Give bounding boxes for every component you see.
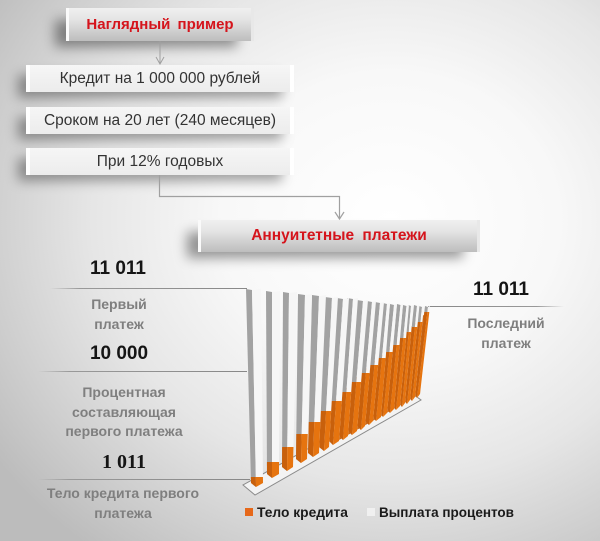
legend marker: principal (245, 508, 253, 516)
leader line: last payment (428, 306, 564, 307)
label: first payment: Первый (91, 296, 147, 312)
arrow: example to loan amount (156, 41, 164, 64)
label: principal part: Тело кредита первого (47, 485, 199, 501)
label: interest part: составляющая (72, 404, 176, 420)
value: interest part: 10 000 (90, 343, 148, 364)
heading: example: Наглядный пример (86, 16, 234, 33)
leader line: first payment (50, 288, 247, 289)
label: last payment: платеж (481, 334, 531, 350)
label: principal part (47, 485, 199, 520)
label: interest part: первого платежа (65, 423, 183, 439)
legend label: principal: Тело кредита (257, 505, 348, 520)
label: interest part: Процентная (82, 384, 166, 400)
leader line: principal part (38, 479, 250, 480)
label: first payment: платеж (94, 316, 144, 332)
label: first payment (91, 296, 147, 332)
box: loan term: Сроком на 20 лет (240 месяцев) (44, 112, 276, 129)
label: principal part: платежа (94, 504, 152, 520)
label: last payment: Последний (467, 315, 545, 331)
chart floor (243, 392, 421, 495)
label: interest part (65, 384, 183, 439)
arrow: conditions to annuity payments (160, 175, 344, 219)
box: loan term (26, 107, 294, 134)
heading: example (66, 8, 254, 41)
box: interest rate (26, 148, 294, 175)
value: first payment: 11 011 (90, 258, 146, 279)
heading: annuity payments: Аннуитетные платежи (251, 227, 427, 244)
legend marker: interest (367, 508, 375, 516)
heading: annuity payments (198, 220, 480, 252)
solid orange mass behind the far bars (334, 312, 427, 440)
box: loan amount (26, 65, 294, 92)
chart and connector graphics (42, 41, 562, 516)
label: last payment (467, 315, 545, 350)
value: last payment: 11 011 (473, 279, 529, 300)
box: interest rate: При 12% годовых (97, 153, 223, 170)
bar chart: payment structure (246, 289, 430, 487)
value: principal part: 1 011 (102, 451, 146, 473)
box: loan amount: Кредит на 1 000 000 рублей (60, 70, 260, 87)
leader line: interest part (38, 371, 247, 372)
legend label: interest: Выплата процентов (379, 505, 514, 520)
